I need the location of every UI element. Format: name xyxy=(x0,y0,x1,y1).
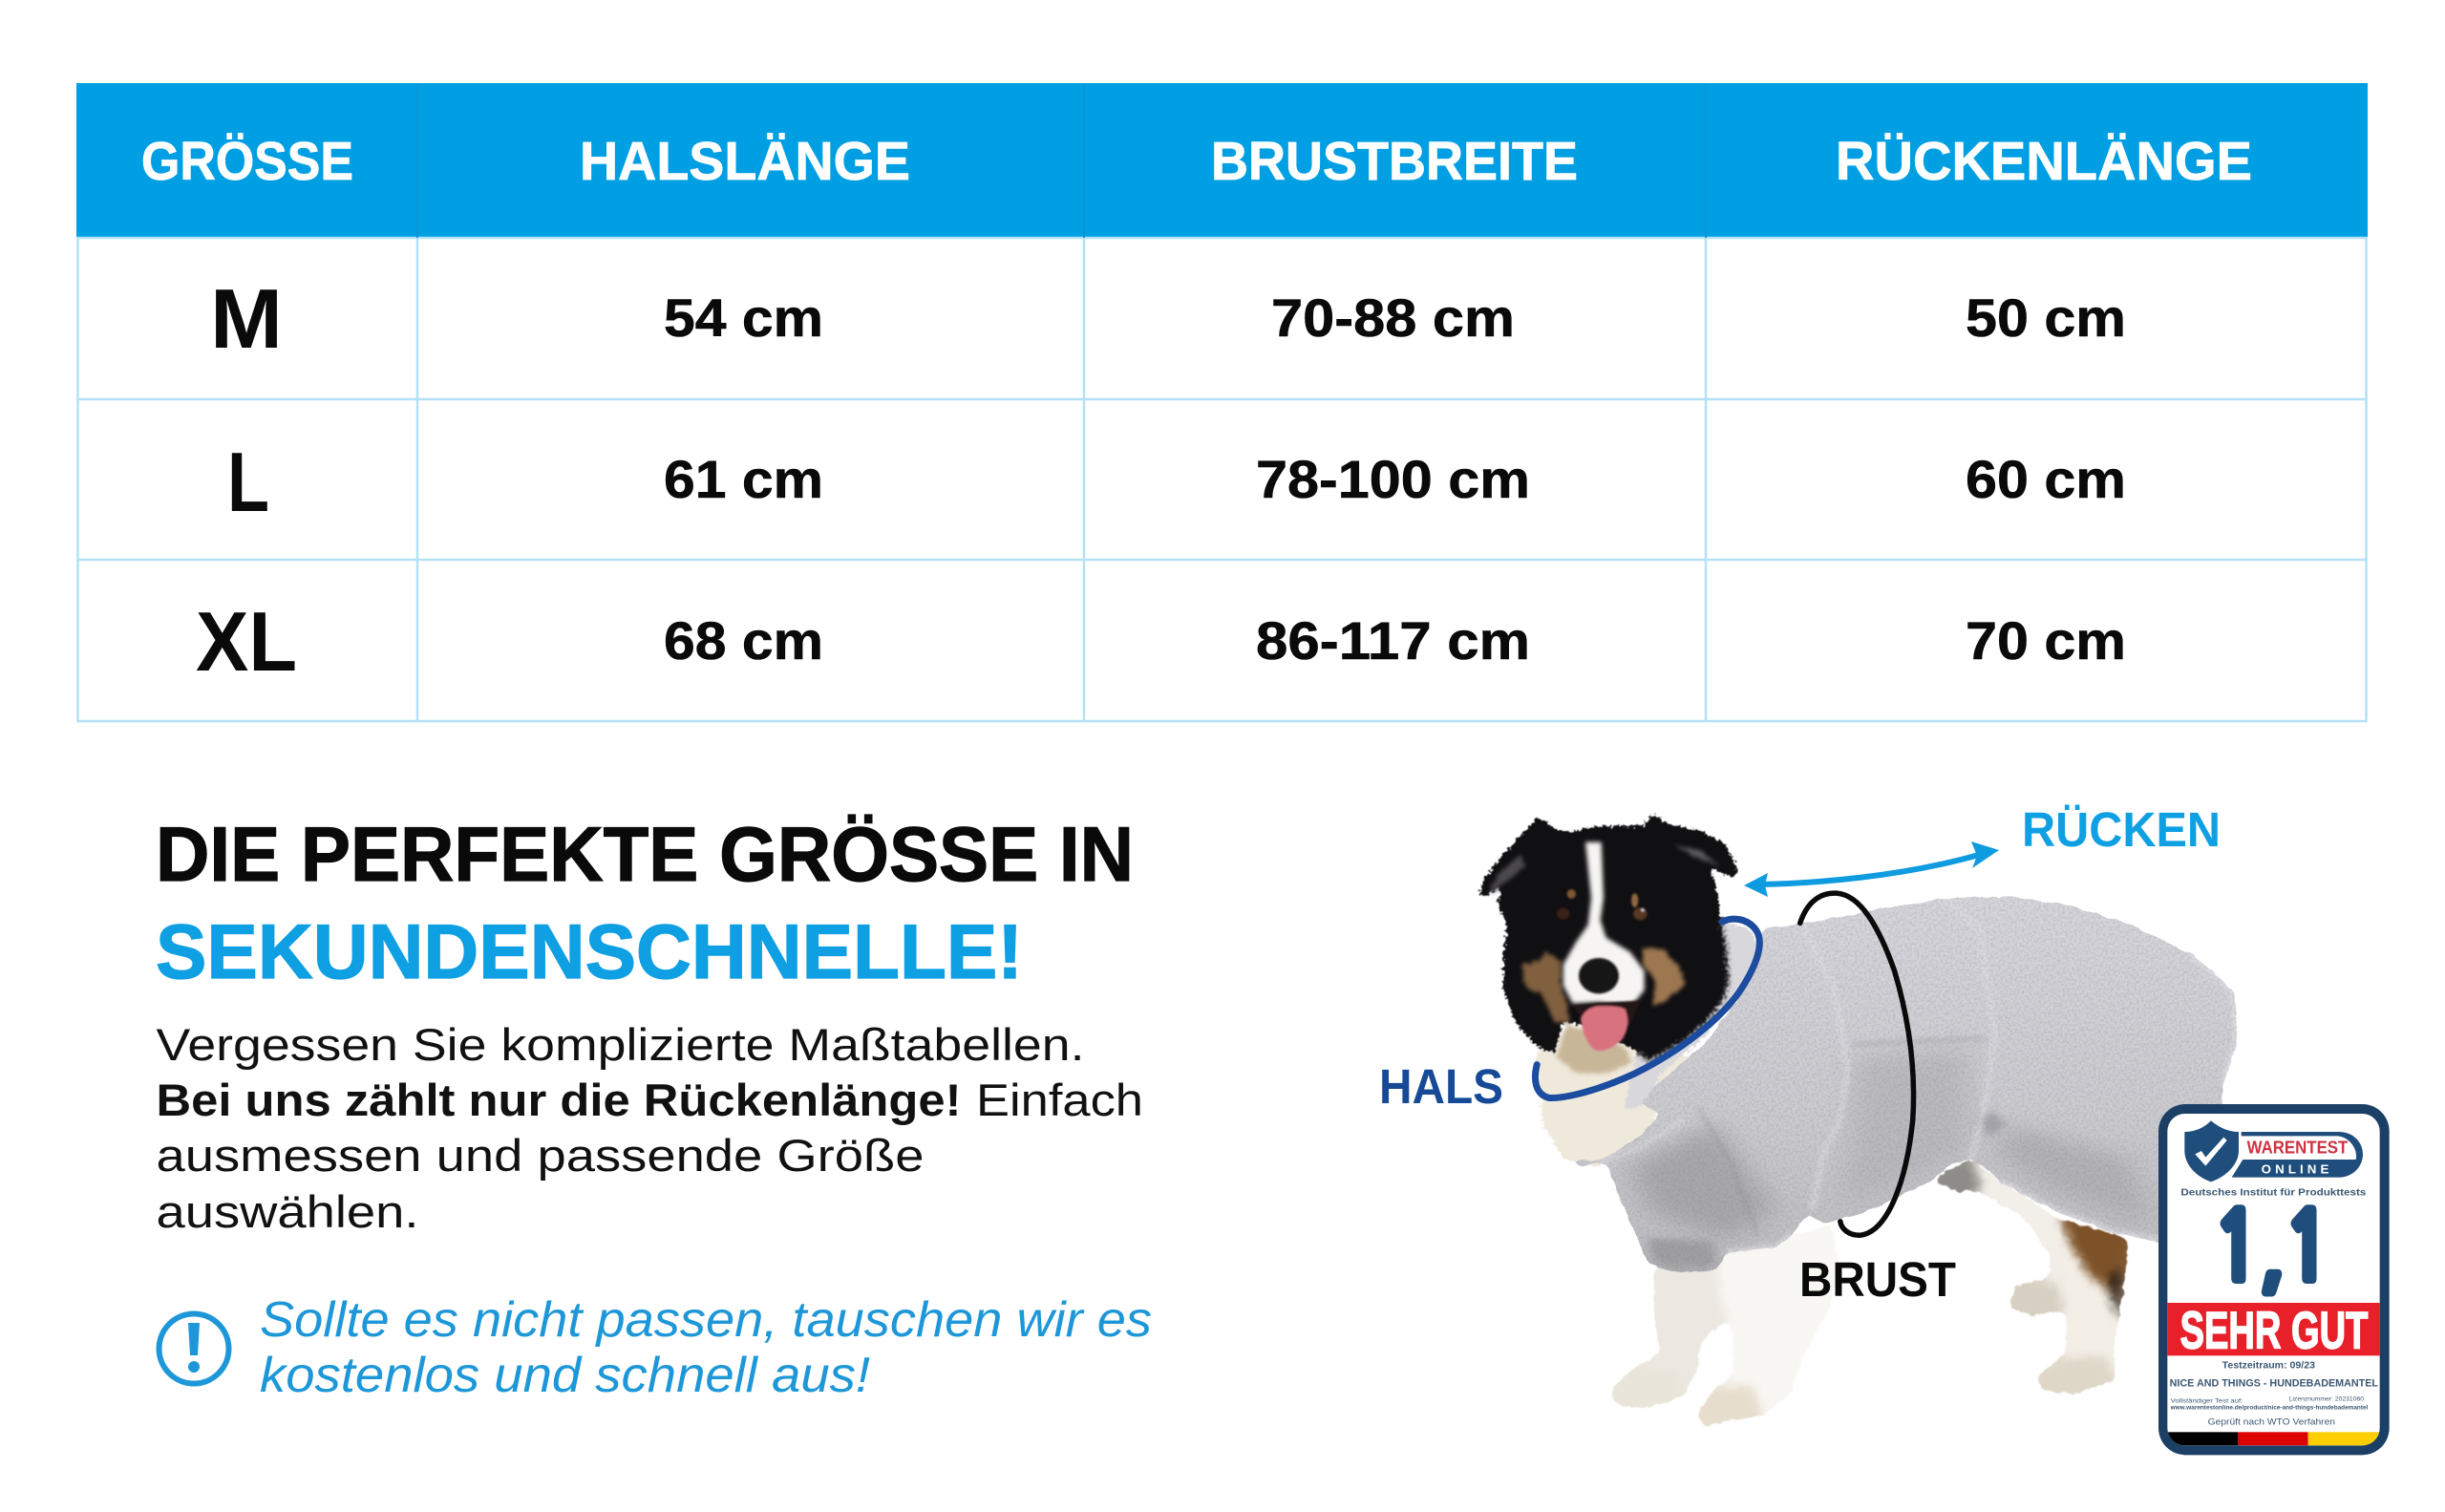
label: Rücken: RÜCKEN xyxy=(2022,802,2221,857)
row XL: XL xyxy=(196,594,297,689)
fine print: Vollständiger Test auf: xyxy=(2171,1397,2243,1404)
neck measure ring xyxy=(1535,919,1759,1098)
grade: 1,1 xyxy=(2213,1200,2331,1293)
mouth xyxy=(1573,1000,1641,1025)
brand name: WARENTEST xyxy=(2247,1137,2349,1157)
row M: 70-88 cm xyxy=(1271,287,1515,348)
row L: 60 cm xyxy=(1966,449,2126,509)
headline: SEKUNDENSCHNELLE! xyxy=(156,909,1023,995)
body text: ausmessen und passende Größe xyxy=(157,1130,925,1181)
header: Rückenlänge: RÜCKENLÄNGE xyxy=(1836,131,2252,192)
body text: Einfach xyxy=(976,1075,1143,1125)
label: Hals: HALS xyxy=(1379,1059,1503,1114)
rating text: SEHR GUT xyxy=(2180,1301,2368,1360)
bathrobe seams xyxy=(1599,899,2236,1251)
method line: Geprüft nach WTO Verfahren xyxy=(2208,1417,2335,1427)
banner xyxy=(2232,1132,2363,1178)
left eye xyxy=(1557,908,1569,920)
dog legs xyxy=(1611,1159,2129,1426)
label: Brust: BRUST xyxy=(1799,1252,1956,1307)
exchange note: kostenlos und schnell aus! xyxy=(260,1348,870,1403)
right eye xyxy=(1633,907,1648,920)
body text: auswählen. xyxy=(157,1186,418,1237)
row M: M xyxy=(210,271,283,366)
eyebrows xyxy=(1567,889,1576,899)
back length arrow xyxy=(1744,841,1999,897)
header: Brustbreite: BRUSTBREITE xyxy=(1211,131,1578,192)
headline xyxy=(156,812,1134,995)
nose xyxy=(1579,958,1619,993)
icon: exclamation mark xyxy=(159,1314,229,1383)
row L: 78-100 cm xyxy=(1256,449,1530,509)
body text xyxy=(157,1019,1143,1237)
institute line: Deutsches Institut für Produkttests xyxy=(2180,1188,2367,1199)
exchange note: Sollte es nicht passen, tauschen wir es xyxy=(260,1292,1152,1348)
headline: DIE PERFEKTE GRÖSSE IN xyxy=(156,812,1134,898)
row L: L xyxy=(227,435,269,529)
header: Größe: GRÖSSE xyxy=(141,131,353,192)
tan cheek markings xyxy=(1487,843,1721,1024)
row XL: 68 cm xyxy=(664,610,823,671)
icon: shield with check xyxy=(2184,1120,2239,1182)
row XL: 70 cm xyxy=(1966,610,2126,671)
white blaze and muzzle xyxy=(1563,842,1645,1006)
cream throat xyxy=(1557,1025,1633,1073)
bathrobe shading xyxy=(1629,1048,2154,1269)
chest measure ring xyxy=(1800,893,1914,1235)
row XL: 86-117 cm xyxy=(1256,610,1530,671)
test period: Testzeitraum: 09/23 xyxy=(2222,1361,2316,1372)
row L xyxy=(227,435,2126,529)
head base fur xyxy=(1478,814,1760,1108)
flag stripe xyxy=(2167,1432,2380,1445)
bathrobe xyxy=(1572,896,2238,1271)
exchange note xyxy=(260,1292,1152,1403)
table header bar xyxy=(76,83,2368,238)
fine print: www.warentestonline.de/product/nice-and-things-hundebademantel xyxy=(2170,1405,2369,1412)
badge frame xyxy=(2158,1104,2390,1455)
row M xyxy=(210,271,2126,366)
row L: 61 cm xyxy=(664,449,823,509)
row XL xyxy=(196,594,2126,689)
test seal badge xyxy=(2158,1104,2390,1455)
product name: NICE AND THINGS - HUNDEBADEMANTEL xyxy=(2170,1378,2378,1390)
face details xyxy=(1557,889,1648,1051)
fine print xyxy=(2170,1396,2369,1412)
tongue xyxy=(1581,1006,1627,1051)
body text: Bei uns zählt nur die Rückenlänge! xyxy=(157,1075,962,1125)
row M: 54 cm xyxy=(664,287,823,348)
chest fur xyxy=(1536,1034,1696,1167)
size table xyxy=(76,83,2368,721)
table grid xyxy=(77,238,2367,721)
body text: Vergessen Sie komplizierte Maßtabellen. xyxy=(157,1019,1085,1070)
rating band xyxy=(2167,1303,2380,1355)
dog head xyxy=(1478,814,1760,1108)
dog in bathrobe xyxy=(1379,802,2390,1455)
test seal badge: ONLINE xyxy=(2262,1161,2328,1176)
fine print: Lizenznummer: 20231060 xyxy=(2289,1396,2364,1403)
row M: 50 cm xyxy=(1966,287,2126,348)
header: Halslänge: HALSLÄNGE xyxy=(580,131,910,192)
